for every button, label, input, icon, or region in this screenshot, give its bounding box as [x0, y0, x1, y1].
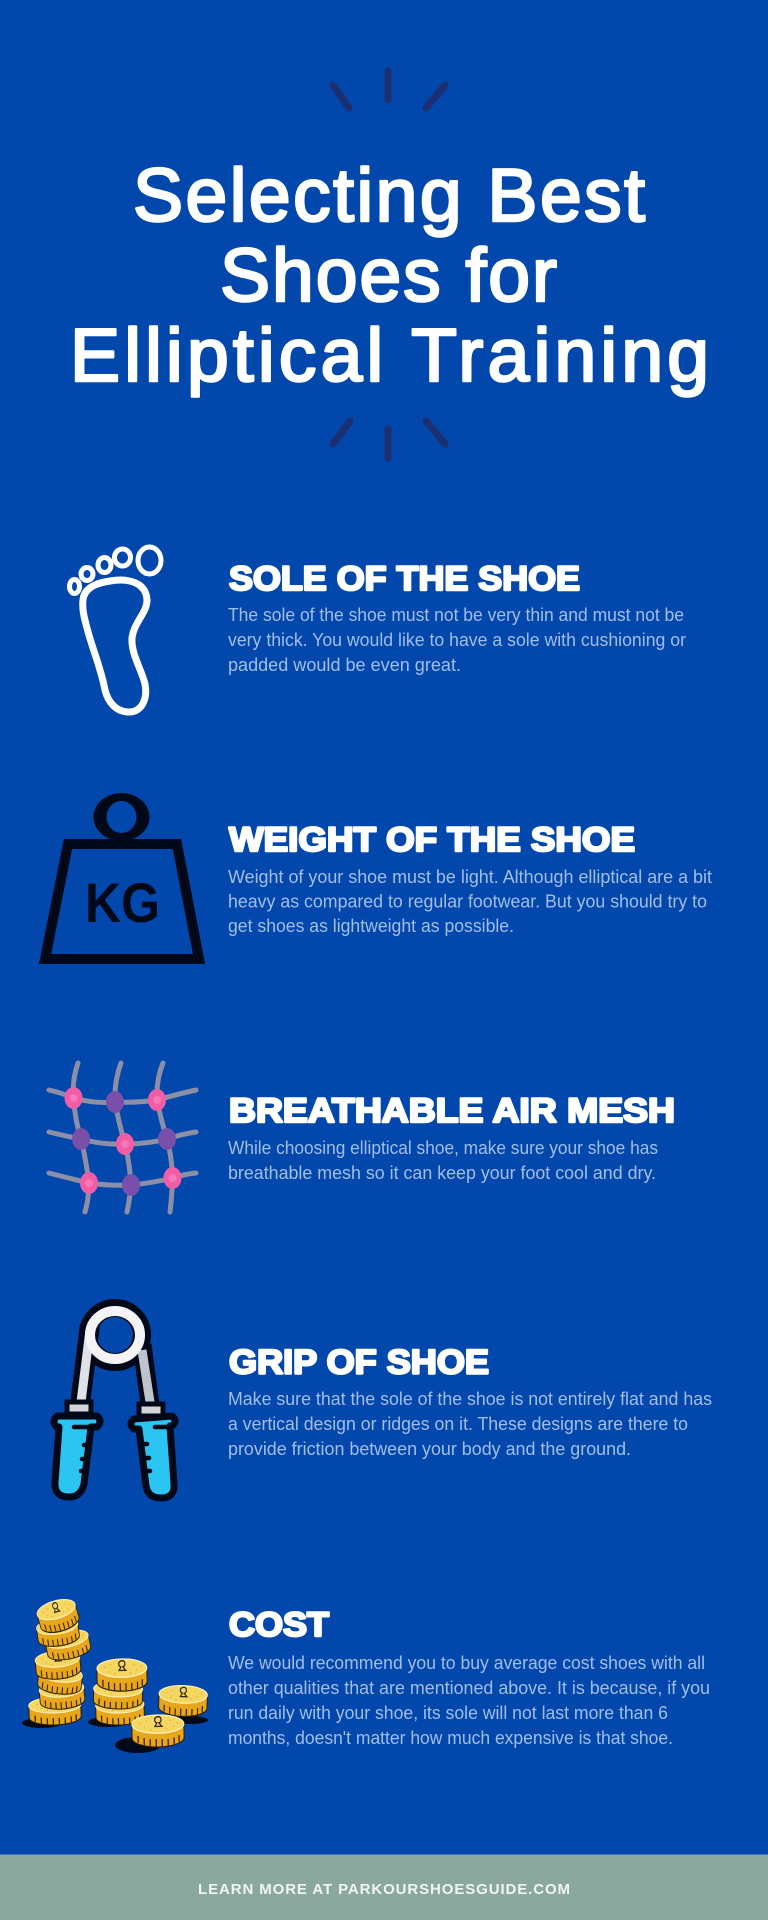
body text: very thick. You would like to have a sole with cushioning or — [228, 630, 686, 650]
title: Selecting Best — [133, 153, 645, 237]
heading: BREATHABLE AIR MESH — [229, 1092, 675, 1130]
icon: coin stacks — [22, 1596, 208, 1753]
panel: sole of the shoe — [70, 547, 686, 712]
panel: weight of the shoe — [45, 793, 712, 959]
footer text: LEARN MORE AT PARKOURSHOESGUIDE.COM — [198, 1881, 570, 1898]
body text: breathable mesh so it can keep your foot cool and dry. — [228, 1163, 656, 1183]
body text: Weight of your shoe must be light. Although elliptical are a bit — [228, 867, 712, 887]
heading: SOLE OF THE SHOE — [229, 560, 580, 598]
body text: We would recommend you to buy average cost shoes with all — [228, 1653, 705, 1673]
body text: months, doesn't matter how much expensive is that shoe. — [228, 1728, 673, 1748]
body text: padded would be even great. — [228, 655, 461, 675]
body text: run daily with your shoe, its sole will not last more than 6 — [228, 1703, 668, 1723]
heading: WEIGHT OF THE SHOE — [229, 821, 635, 859]
body text — [228, 605, 686, 675]
footer banner — [0, 1854, 768, 1920]
body text: heavy as compared to regular footwear. But you should try to — [228, 892, 707, 912]
icon: kg weight — [45, 793, 199, 959]
panel: breathable air mesh — [49, 1063, 675, 1212]
body text: a vertical design or ridges on it. These designs are there to — [228, 1414, 688, 1434]
icon: mesh net — [49, 1063, 196, 1212]
body text: other qualities that are mentioned above. It is because, if you — [228, 1678, 710, 1698]
heading: GRIP OF SHOE — [229, 1344, 489, 1382]
body text — [228, 1389, 712, 1459]
panel: cost — [22, 1596, 710, 1753]
bottom burst rays — [333, 421, 445, 458]
icon: kg weight: KG — [85, 871, 160, 934]
body text — [228, 1138, 658, 1183]
title — [70, 153, 709, 397]
body text: While choosing elliptical shoe, make sure your shoe has — [228, 1138, 658, 1158]
body text: get shoes as lightweight as possible. — [228, 916, 514, 936]
top burst rays — [333, 71, 445, 108]
body text: Make sure that the sole of the shoe is not entirely flat and has — [228, 1389, 712, 1409]
title: Shoes for — [220, 233, 557, 317]
body text: The sole of the shoe must not be very thin and must not be — [228, 605, 684, 625]
icon: hand grip — [54, 1308, 175, 1498]
panel: grip of shoe — [54, 1308, 712, 1498]
icon: foot outline — [70, 547, 161, 712]
body text: provide friction between your body and the ground. — [228, 1439, 631, 1459]
title: Elliptical Training — [70, 313, 709, 397]
heading: COST — [229, 1606, 329, 1644]
body text — [228, 1653, 710, 1748]
body text — [228, 867, 712, 936]
